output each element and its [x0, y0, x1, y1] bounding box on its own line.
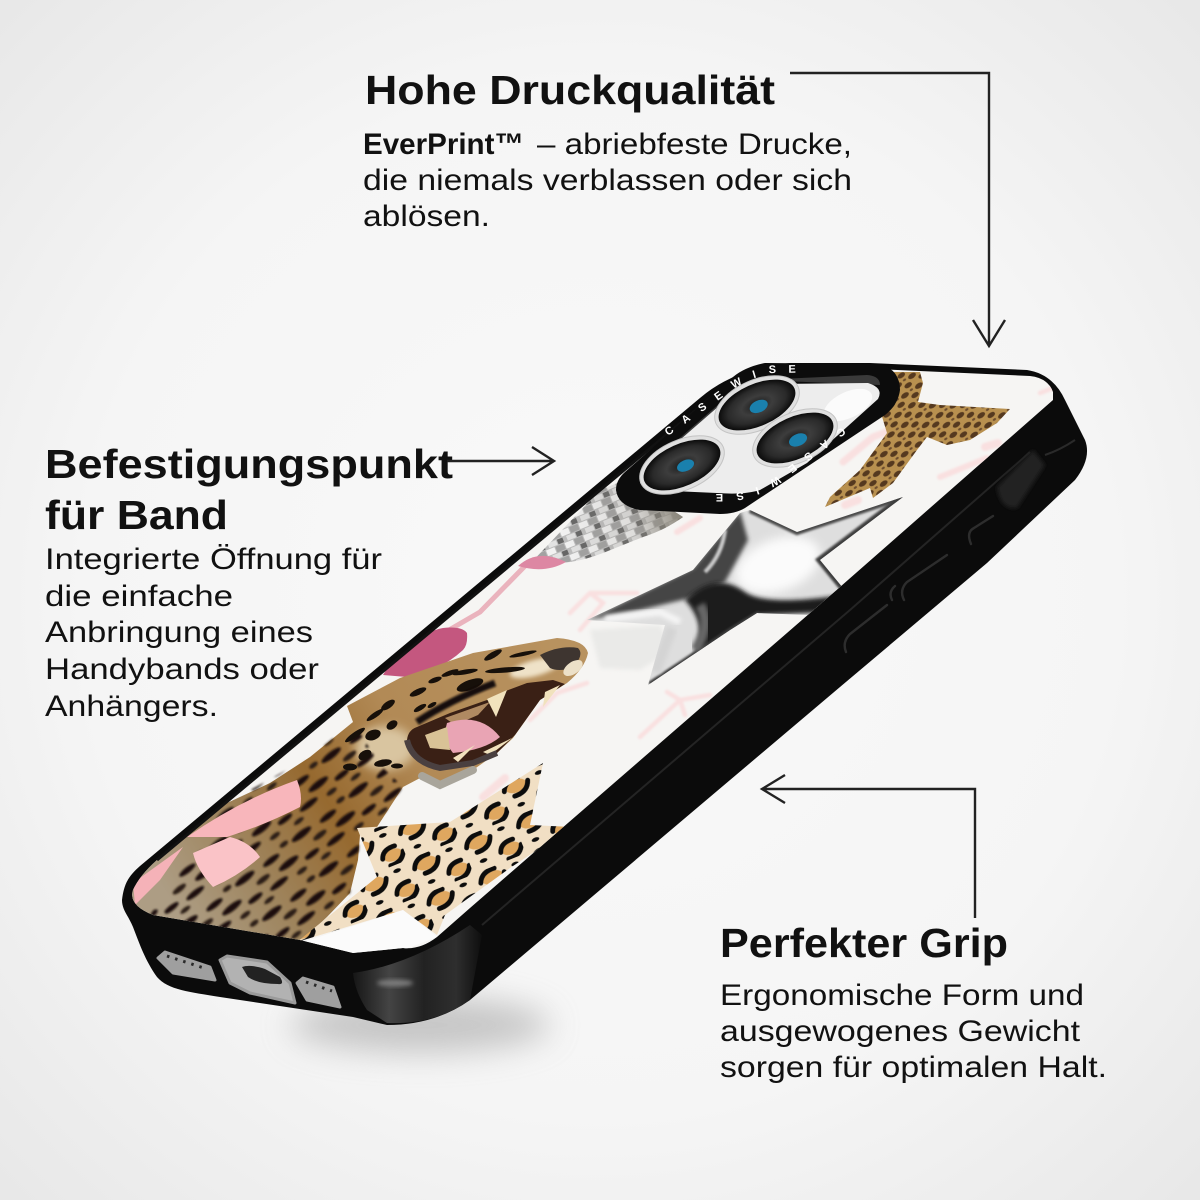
leopard mouth: [407, 680, 565, 768]
glossy bottom corner: [353, 925, 482, 1023]
ring lettering bottom: CASEWISE: [716, 428, 845, 502]
callout: grip: [720, 920, 1107, 1084]
left speaker: [158, 952, 215, 980]
heading: für Band: [45, 492, 228, 538]
pink tulip: [383, 628, 467, 677]
corner sheen: [1045, 440, 1075, 455]
tulip stem: [448, 566, 526, 628]
tongue: [445, 720, 500, 753]
leopard: [120, 638, 588, 945]
screen artwork: [132, 370, 1053, 953]
lower teeth: [425, 727, 450, 750]
arrow: print quality: [790, 73, 1005, 346]
description: Ergonomische Form und: [720, 979, 1084, 1012]
head spots: [343, 647, 537, 770]
description: [720, 979, 1107, 1084]
description: – abriebfeste Drucke,: [537, 128, 852, 161]
gloss highlight: [377, 980, 413, 986]
heading: [45, 441, 453, 538]
charging port: [220, 956, 295, 1003]
heading: Hohe Druckqualität: [365, 67, 775, 113]
lens top: [706, 364, 808, 446]
pink flower: [518, 556, 566, 569]
front muzzle: [563, 660, 583, 676]
nose: [540, 647, 580, 670]
ring inner bevel: [643, 375, 880, 470]
right speaker: [297, 978, 340, 1007]
upper left band: [587, 511, 748, 620]
pale pink ribbons: [479, 386, 1053, 801]
dark centre: [685, 583, 835, 662]
cheek highlight: [355, 726, 415, 770]
pale grey smudge: [592, 626, 662, 668]
description: Anhängers.: [45, 690, 218, 723]
side inner contour: [482, 452, 1030, 925]
callout: print quality: [363, 67, 852, 233]
white lower corner: [297, 910, 437, 953]
upper side panel: [997, 450, 1045, 508]
description: die niemals verblassen oder sich: [363, 164, 852, 197]
lip: [407, 740, 497, 768]
heading: Perfekter Grip: [720, 920, 1008, 966]
leopard print bow: [825, 372, 1010, 507]
arrow: strap attachment: [447, 447, 554, 475]
dark mouth edge: [417, 683, 495, 722]
muzzle highlight: [508, 656, 557, 681]
right spike edges: [750, 497, 903, 532]
chrome star: [588, 497, 903, 685]
heading: Befestigungspunkt: [45, 441, 453, 487]
disco ball: [537, 483, 683, 562]
palate: [445, 702, 489, 722]
leopard silhouette: [120, 638, 588, 945]
leopard print star: [297, 763, 572, 942]
description: sorgen für optimalen Halt.: [720, 1051, 1107, 1084]
description: ausgewogenes Gewicht: [720, 1015, 1081, 1048]
description: [363, 128, 852, 233]
neck spots: [150, 722, 403, 945]
artwork base: [132, 370, 1053, 953]
description: Anbringung eines: [45, 616, 313, 649]
lower edge: [650, 614, 760, 685]
camera glass: [640, 383, 880, 494]
pink bow: [133, 780, 301, 905]
callout: strap attachment: [45, 441, 453, 723]
chin fur: [422, 770, 473, 785]
left arm light: [605, 612, 680, 622]
camera module: [616, 363, 900, 514]
description: Handybands oder: [45, 653, 319, 686]
lens right: [744, 397, 846, 479]
phone shadow: [290, 997, 550, 1053]
description: ablösen.: [363, 200, 490, 233]
side buttons: [845, 516, 993, 652]
description: EverPrint™: [363, 128, 524, 161]
case body: [122, 363, 1087, 1025]
description: [45, 543, 382, 723]
ring lettering top: CASEWISE: [665, 365, 796, 434]
arrow: grip: [762, 775, 975, 918]
description: Integrierte Öffnung für: [45, 543, 382, 576]
glass edge line: [157, 390, 720, 860]
description: die einfache: [45, 580, 233, 613]
fangs: [453, 685, 560, 762]
lens left: [631, 424, 733, 506]
phone case illustration: [122, 363, 1088, 1025]
camera ring: [616, 363, 900, 514]
